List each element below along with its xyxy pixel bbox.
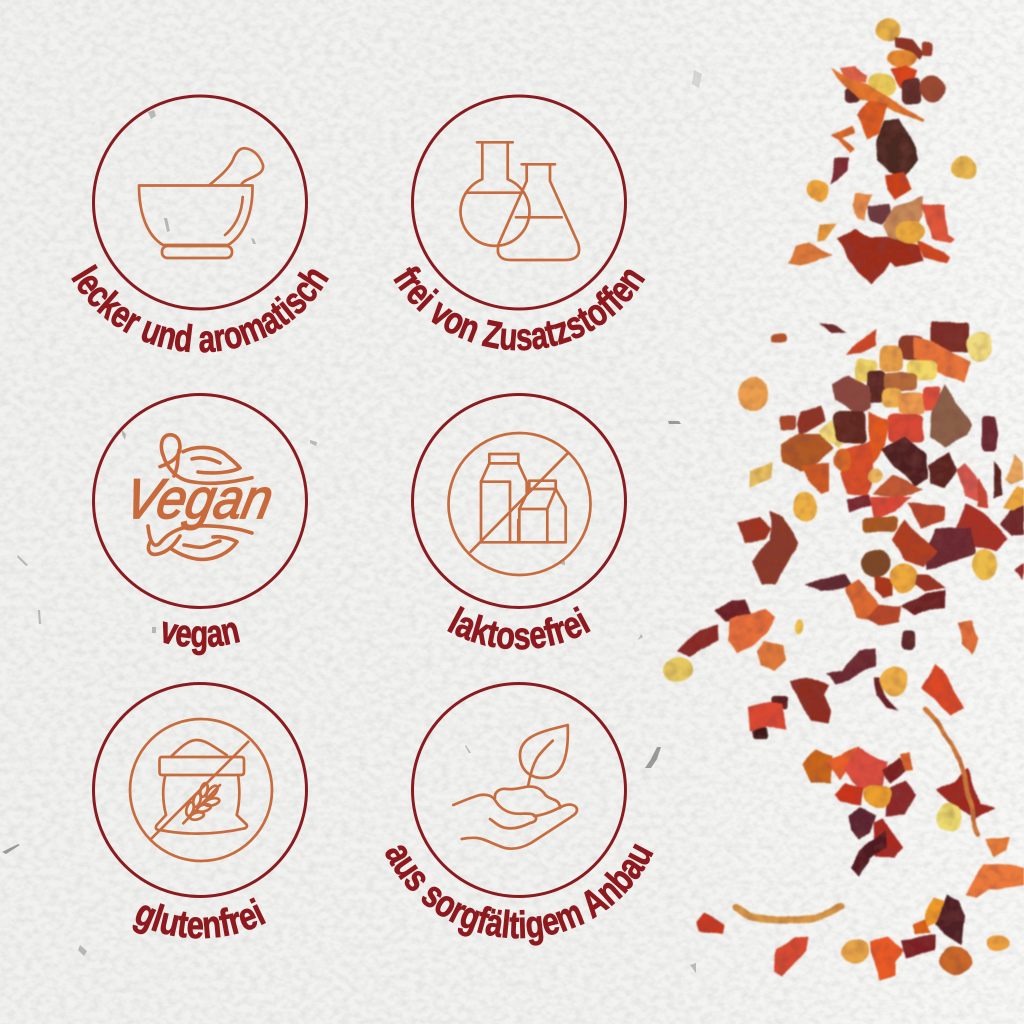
icon: mortar and pestle: [139, 148, 263, 258]
photo: scattered dried fruit pieces: [663, 18, 1024, 980]
icon: vegan script logo with leaves: [119, 435, 279, 559]
label: vegan: [162, 621, 240, 656]
badge: glutenfrei: [92, 682, 308, 939]
icon: hand holding seedling: [453, 725, 577, 849]
badge: frei von Zusatzstoffen: [393, 94, 646, 351]
label: lecker und aromatisch: [71, 264, 329, 353]
icon: crossed-out flour sack: [130, 719, 272, 861]
icon: lab flasks: [460, 142, 579, 260]
icon: vegan script logo with leaves: Vegan: [119, 468, 279, 530]
label: glutenfrei: [132, 897, 266, 939]
badge: laktosefrei: [411, 393, 627, 698]
label: frei von Zusatzstoffen: [393, 266, 646, 351]
badge: aus sorgfältigem Anbau: [385, 682, 654, 946]
icon: crossed-out milk cartons: [448, 433, 590, 575]
badge: vegan: [92, 393, 308, 692]
label: laktosefrei: [447, 606, 591, 650]
lower fruit cluster: [663, 648, 1024, 980]
middle fruit cluster: [677, 322, 1024, 672]
label: aus sorgfältigem Anbau: [385, 844, 654, 946]
upper fruit cluster: [787, 18, 977, 285]
badge: lecker und aromatisch: [71, 94, 329, 353]
